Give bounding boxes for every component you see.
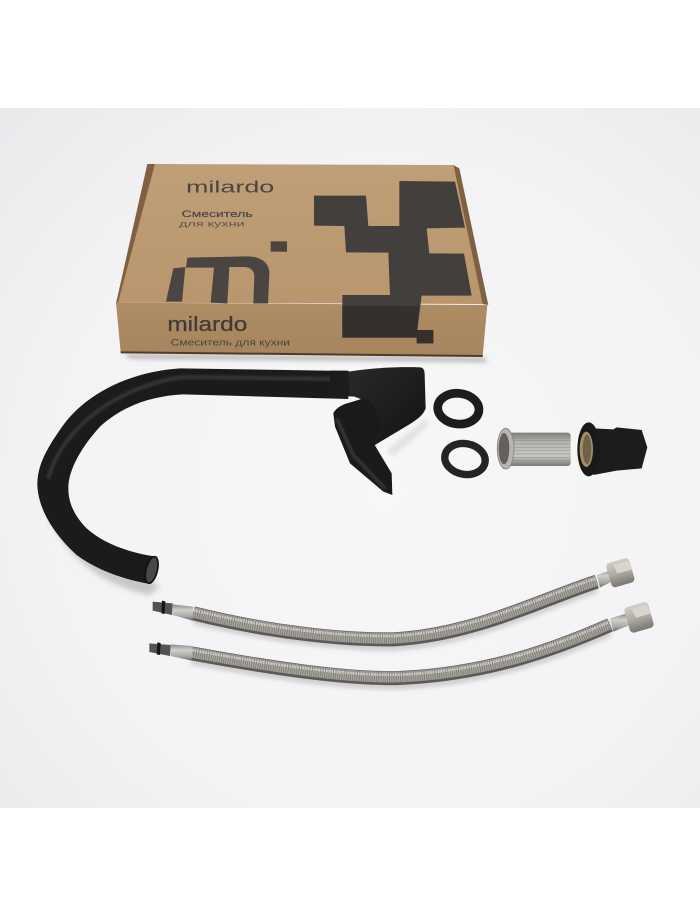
faucet body and lever	[330, 367, 429, 495]
gaskets and mounting parts	[436, 391, 647, 478]
spout shadow	[48, 500, 160, 595]
cardboard box	[116, 164, 488, 362]
front brand name: milardo	[167, 313, 247, 336]
lower hose	[192, 622, 610, 678]
collar	[330, 371, 353, 397]
lower rubber ring	[442, 440, 488, 478]
nut flange	[577, 422, 600, 476]
braided hoses	[149, 557, 655, 685]
lid brand name: milardo	[186, 177, 274, 196]
threaded steel sleeve	[497, 428, 571, 469]
sleeve threads	[513, 437, 570, 461]
photo background	[0, 108, 700, 808]
box lid	[118, 164, 483, 304]
hose shadows	[192, 588, 610, 685]
pixel pattern graphic	[314, 181, 472, 343]
box front face	[116, 303, 487, 356]
lid product subtitle: для кухни	[179, 218, 245, 228]
lever	[333, 398, 392, 495]
large m logo	[166, 241, 287, 303]
upper hose	[193, 578, 597, 639]
sleeve opening	[499, 433, 509, 464]
pattern front shading	[342, 306, 433, 343]
upper hose end fittings	[153, 557, 635, 621]
lid product name: Смеситель	[182, 209, 253, 219]
front product name: Смеситель для кухни	[171, 338, 290, 348]
box shadow	[123, 354, 488, 362]
box bottom edge	[121, 352, 483, 356]
box side flaps	[116, 164, 488, 305]
black plastic nut	[577, 422, 647, 476]
lower hose end fittings	[149, 601, 655, 661]
body shadow	[387, 418, 429, 457]
lever highlight	[337, 418, 385, 488]
spout highlight	[48, 377, 340, 478]
sleeve flange	[497, 428, 514, 469]
brass insert	[580, 432, 593, 467]
mixer body	[348, 367, 426, 446]
aerator tip	[143, 555, 160, 585]
faucet spout	[37, 368, 348, 585]
logo dot	[271, 241, 287, 252]
upper rubber ring	[436, 391, 480, 426]
